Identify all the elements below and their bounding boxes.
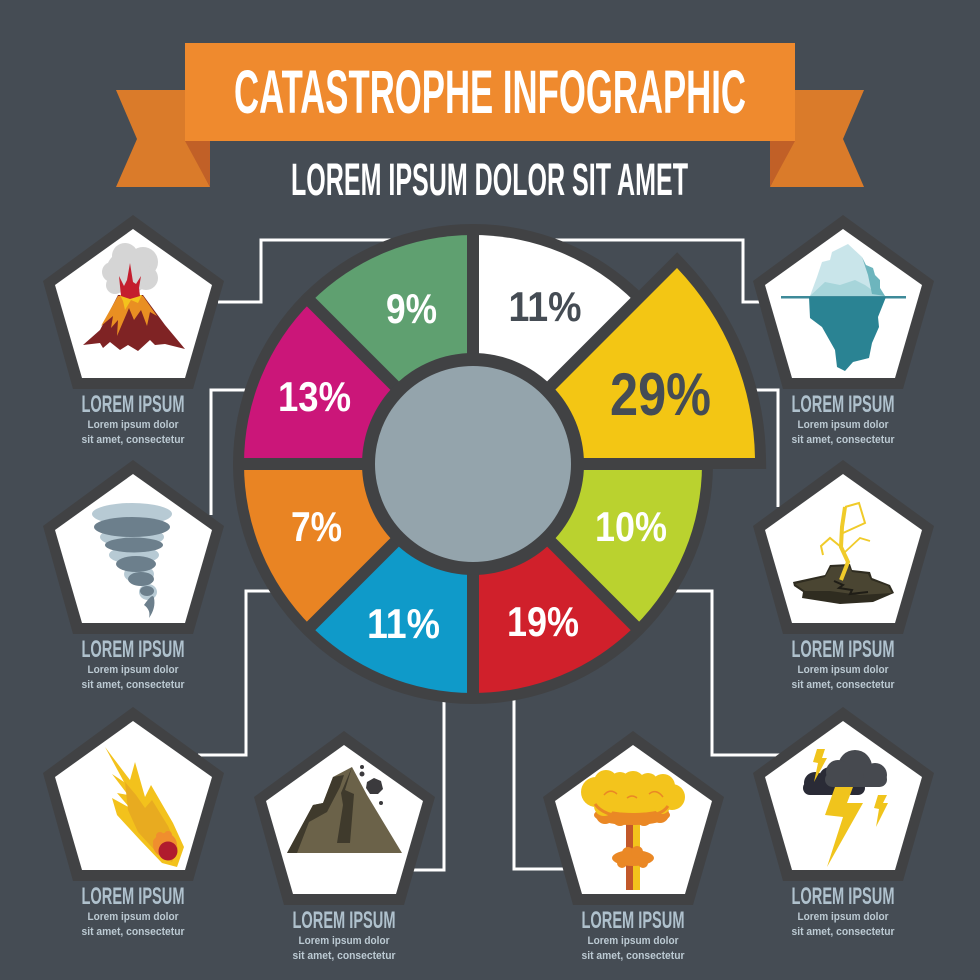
panel: meteor: LOREM IPSUM <box>82 883 184 910</box>
panel: tornado <box>43 460 224 691</box>
panel: thunderstorm <box>753 707 934 938</box>
segment: yellow 29% <box>487 268 755 458</box>
icon: cracked ground and lightning <box>793 503 894 604</box>
panel: thunderstorm: Lorem ipsum dolor <box>798 911 889 923</box>
panel: meteor: sit amet, consectetur <box>82 926 185 938</box>
panel: volcano: LOREM IPSUM <box>82 391 184 418</box>
segment: magenta 13% <box>244 302 473 464</box>
panel: nuclear explosion: sit amet, consectetur <box>582 950 685 962</box>
icon: meteor <box>105 747 184 867</box>
icon: tornado <box>92 503 172 618</box>
percent labels: 11% <box>508 283 582 330</box>
segment: orange 7% <box>244 464 473 626</box>
donut chart <box>233 224 755 704</box>
segment: blue 11% <box>311 464 473 693</box>
segment: green 9% <box>311 235 473 464</box>
panel: thunderstorm: LOREM IPSUM <box>792 883 894 910</box>
panel: lightning strike on ground: LOREM IPSUM <box>792 636 894 663</box>
segment: red 19% <box>473 464 635 693</box>
panel: tornado: sit amet, consectetur <box>82 679 185 691</box>
percent labels: 11% <box>367 600 440 647</box>
icon: mushroom cloud <box>581 770 685 890</box>
panel: thunderstorm: sit amet, consectetur <box>792 926 895 938</box>
icon: mountain <box>287 765 402 853</box>
panel: lightning strike on ground: Lorem ipsum dolor <box>798 664 889 676</box>
connector lines <box>198 240 785 870</box>
percent labels <box>278 283 711 647</box>
panel: mountain rockfall <box>254 731 435 962</box>
panel: meteor <box>43 707 224 938</box>
icon: storm cloud and lightning <box>803 749 888 867</box>
panel: volcano: Lorem ipsum dolor <box>88 419 179 431</box>
percent labels: 13% <box>278 373 351 420</box>
panel: tornado: LOREM IPSUM <box>82 636 184 663</box>
panel: nuclear explosion <box>543 731 724 962</box>
hub <box>375 366 571 562</box>
panel: volcano <box>43 215 224 446</box>
panel: mountain rockfall: LOREM IPSUM <box>292 907 396 934</box>
icon: volcano <box>83 243 185 351</box>
panel: mountain rockfall: Lorem ipsum dolor <box>298 935 390 947</box>
percent labels: 10% <box>595 503 667 550</box>
percent labels: 29% <box>610 361 711 428</box>
percent labels: 7% <box>291 503 342 550</box>
panel: iceberg: LOREM IPSUM <box>792 391 894 418</box>
panel: tornado: Lorem ipsum dolor <box>88 664 179 676</box>
panel: iceberg: Lorem ipsum dolor <box>798 419 889 431</box>
panel: iceberg: sit amet, consectetur <box>792 434 895 446</box>
percent labels: 9% <box>386 285 437 332</box>
title ribbon <box>116 43 864 187</box>
panel: volcano: sit amet, consectetur <box>82 434 185 446</box>
panel: lightning strike on ground: sit amet, consectetur <box>792 679 895 691</box>
panel: iceberg <box>753 215 934 446</box>
percent labels: 19% <box>507 598 579 645</box>
segment: white 11% <box>473 235 635 464</box>
panel: nuclear explosion: Lorem ipsum dolor <box>588 935 679 947</box>
segment: lime 10% <box>473 464 702 626</box>
panel: mountain rockfall: sit amet, consectetur <box>292 950 396 962</box>
panel: nuclear explosion: LOREM IPSUM <box>582 907 684 934</box>
panel: lightning strike on ground <box>753 460 934 691</box>
panel: meteor: Lorem ipsum dolor <box>88 911 179 923</box>
icon: iceberg <box>781 244 906 371</box>
